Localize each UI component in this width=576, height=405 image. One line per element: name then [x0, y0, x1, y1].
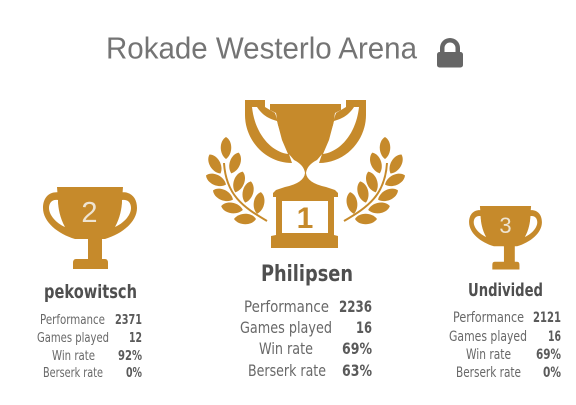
- stats: Undivided: 16: [548, 329, 561, 345]
- stats: pekowitsch: [37, 312, 142, 381]
- stats: Philipsen: 2236: [339, 297, 372, 316]
- stats: Undivided: 2121: [533, 310, 561, 326]
- digit: 3: 3: [499, 213, 512, 238]
- stats: pekowitsch: Performance: [40, 312, 105, 328]
- laurel: left: [204, 137, 267, 224]
- icon: trophy 2: [43, 187, 137, 269]
- stats: Philipsen: Performance: [244, 297, 329, 316]
- icon: large trophy with laurels: [204, 100, 407, 248]
- stats: pekowitsch: 92%: [118, 348, 142, 364]
- stats: Philipsen: [240, 297, 372, 380]
- icon: trophy 3: [469, 206, 542, 270]
- stats: Undivided: [449, 310, 561, 381]
- digit: 2: 2: [81, 197, 98, 229]
- stats: Philipsen: Games played: [240, 318, 332, 337]
- player name: Philipsen: Philipsen: [261, 262, 353, 287]
- player name: pekowitsch: pekowitsch: [44, 281, 137, 303]
- stats: Undivided: 0%: [543, 365, 561, 381]
- laurel: right: [344, 137, 407, 224]
- stats: Undivided: Performance: [453, 310, 524, 326]
- stats: pekowitsch: Win rate: [52, 348, 95, 364]
- stats: pekowitsch: Berserk rate: [43, 365, 103, 381]
- title: Rokade Westerlo Arena: [106, 30, 418, 66]
- stats: Undivided: 69%: [536, 347, 561, 363]
- player name: Undivided: Undivided: [468, 280, 543, 301]
- stats: Undivided: Games played: [449, 329, 527, 345]
- stats: pekowitsch: Games played: [37, 330, 109, 346]
- stats: Philipsen: Berserk rate: [248, 361, 326, 380]
- stats: Philipsen: 69%: [342, 339, 372, 358]
- stats: Undivided: Berserk rate: [456, 365, 521, 381]
- stats: pekowitsch: 2371: [115, 312, 142, 328]
- stats: Philipsen: 16: [356, 318, 372, 337]
- stats: Philipsen: Win rate: [259, 339, 313, 358]
- stats: pekowitsch: 0%: [126, 365, 142, 381]
- panel: second place: [37, 187, 142, 381]
- panel: first place: [204, 100, 407, 380]
- stats: Philipsen: 63%: [342, 361, 372, 380]
- icon: padlock: [437, 38, 463, 68]
- stats: pekowitsch: 12: [129, 330, 142, 346]
- digit: 1: 1: [297, 202, 313, 235]
- stats: Undivided: Win rate: [466, 347, 511, 363]
- panel: third place: [449, 206, 561, 381]
